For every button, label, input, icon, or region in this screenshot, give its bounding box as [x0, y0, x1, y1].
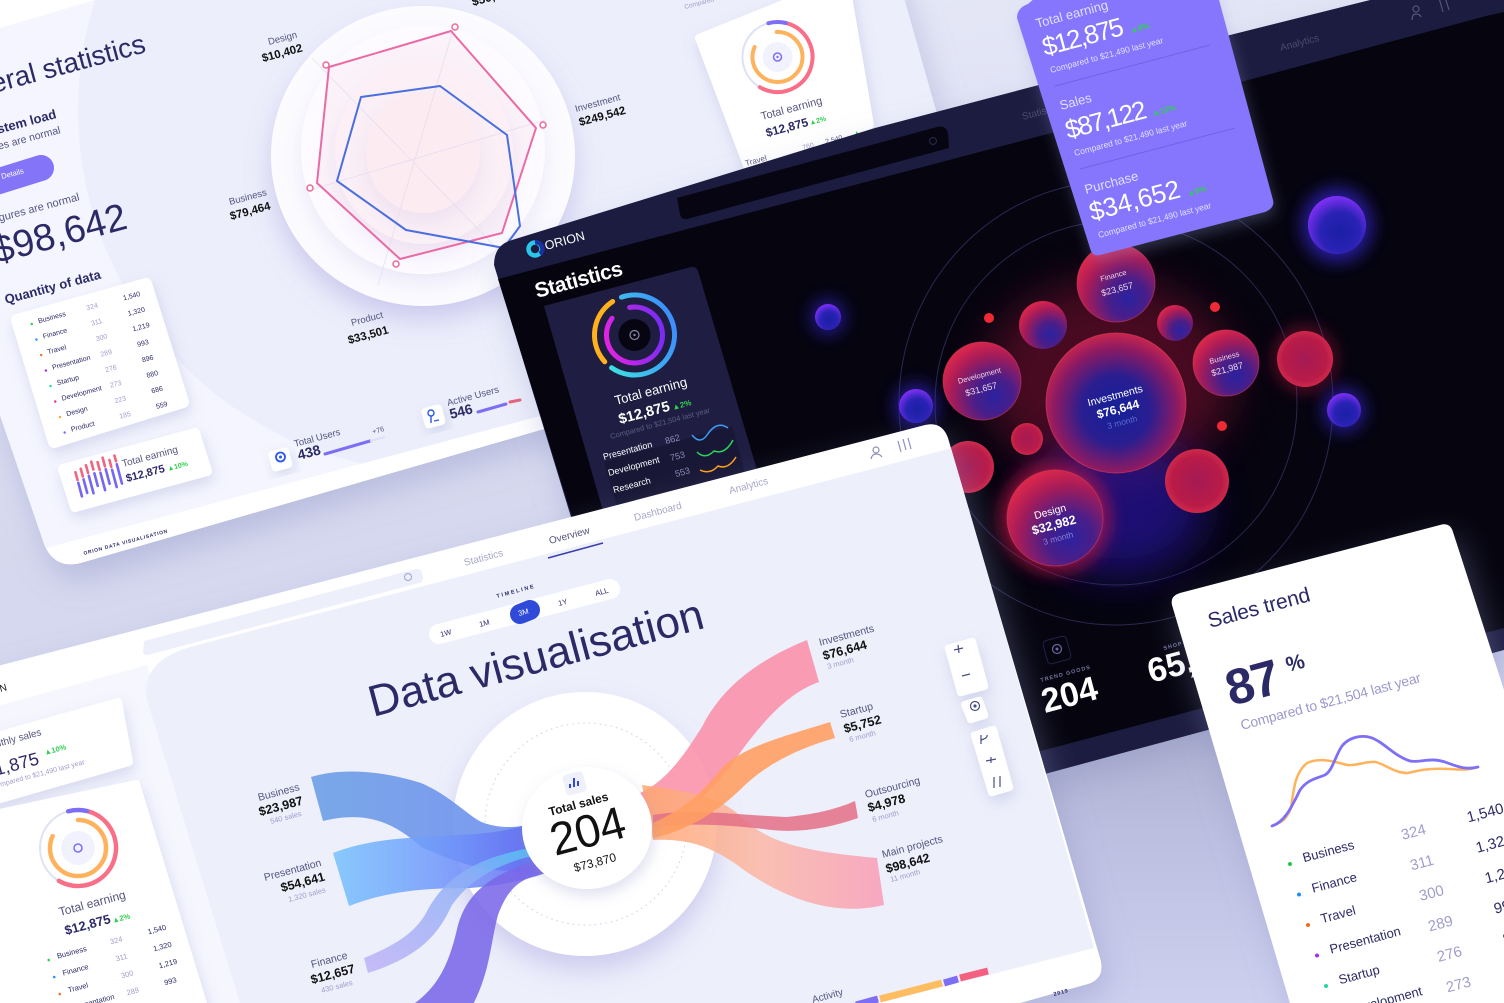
table card: quantity of data: Product — [70, 421, 96, 434]
card: left total earning: $12,875 — [63, 911, 112, 938]
card: left total earning: 1,219 — [158, 957, 178, 970]
card: left total earning: 993 — [163, 975, 178, 987]
radar labels — [228, 0, 627, 347]
text: system load — [0, 106, 62, 158]
center total sales: $73,870 — [572, 850, 618, 875]
sankey labels left: Finance — [310, 950, 349, 971]
sankey labels left — [257, 781, 356, 995]
card: top total earning: ▲ — [853, 129, 861, 138]
card: dark total earning: Development — [607, 454, 661, 478]
card: left total earning: Finance — [61, 962, 89, 978]
card: left total earning: Total earning — [57, 888, 127, 919]
card: sales trend: Presentation — [1328, 923, 1402, 957]
bubble: investments — [1046, 333, 1186, 473]
table card: quantity of data: Presentation — [52, 355, 91, 372]
card: total earning with bars: $12,875 — [125, 463, 166, 485]
timeline selector: 1W — [439, 627, 453, 639]
bubble: investments: Investments — [1086, 383, 1144, 409]
bubble: design: $32,982 — [1030, 513, 1078, 538]
bubble: business — [1193, 330, 1259, 396]
background shade lower right — [1030, 700, 1330, 1003]
card: purple metrics: ▲9% — [1186, 184, 1207, 198]
bubble: design: Design — [1033, 502, 1068, 522]
radar labels: Business — [228, 187, 268, 208]
card: dark total earning: 753 — [669, 449, 686, 463]
radar labels: $79,464 — [229, 200, 273, 223]
bubble: finance — [1077, 244, 1155, 322]
card: purple metrics: ▲8% — [1129, 21, 1150, 35]
stat: total users — [267, 426, 385, 472]
search field — [143, 569, 423, 655]
card: left total earning: 1,320 — [152, 940, 173, 953]
card: purple metrics: $34,652 — [1086, 174, 1183, 227]
sankey labels right: $98,642 — [884, 851, 931, 876]
card: top total earning: 760 — [802, 142, 815, 152]
card: left total earning: ▲2% — [111, 911, 131, 925]
card: dark total earning: Total earning — [613, 374, 689, 408]
stat: total users: Total Users — [293, 427, 342, 450]
bubble: design — [1007, 470, 1103, 566]
navigation tabs — [463, 476, 769, 569]
radar labels: Product — [350, 310, 385, 329]
card: left total earning: 300 — [120, 968, 134, 980]
card: sales trend: Business — [1301, 837, 1356, 865]
center total sales: 204 — [544, 796, 631, 866]
heading: quantity of data: Quantity of data — [3, 267, 103, 307]
sankey labels left: 1,320 sales — [287, 885, 327, 904]
sankey labels left: $12,657 — [309, 962, 356, 987]
bubble cluster — [815, 196, 1366, 513]
bubble: finance: $23,657 — [1100, 280, 1134, 298]
sankey labels right: 6 month — [848, 728, 877, 744]
table card: quantity of data: 686 — [151, 386, 164, 395]
table card: quantity of data: 300 — [95, 333, 108, 343]
card: dark total earning: Presentation — [602, 439, 653, 462]
card: total earning with bars — [63, 433, 207, 507]
button: details: Details — [0, 166, 25, 181]
logo: orion — [528, 229, 586, 256]
table card: quantity of data: 276 — [105, 364, 118, 374]
icon: dark user and sliders — [1412, 0, 1449, 20]
card: sales trend — [1172, 524, 1504, 1003]
card: sales trend: 276 — [1435, 943, 1464, 966]
card: purple metrics: Purchase — [1083, 168, 1140, 197]
card: left total earning: Business — [56, 944, 88, 961]
stat: active users — [420, 384, 520, 429]
table card: quantity of data: 896 — [141, 355, 154, 364]
card: dark total earning: $12,875 — [617, 399, 672, 428]
card: purple metrics — [1017, 0, 1273, 255]
table card: quantity of data: 273 — [109, 380, 122, 390]
card: top total earning: 2,540 — [825, 135, 844, 146]
panel: orion dark dashboard — [494, 0, 1504, 874]
card: sales trend: % — [1283, 650, 1308, 677]
bubble: development: Development — [957, 365, 1003, 386]
table card: quantity of data: 880 — [146, 370, 159, 380]
card: purple metrics: $12,875 — [1039, 11, 1127, 62]
icon: user — [871, 447, 882, 459]
bubble: development — [943, 342, 1021, 420]
bubble glow — [810, 187, 1373, 575]
stats: trend goods: TREND GOODS — [1040, 665, 1092, 684]
table card: quantity of data: 1,540 — [122, 291, 141, 302]
navigation tabs: Overview — [548, 525, 592, 547]
card: left total earning: 1,540 — [147, 923, 167, 936]
logo: orion: ORION — [543, 229, 586, 253]
radar labels: $33,501 — [347, 324, 391, 347]
sankey labels left: Presentation — [263, 857, 323, 884]
table card: quantity of data: 559 — [155, 401, 169, 411]
radar labels: $249,542 — [578, 105, 627, 129]
bubble: design: 3 month — [1042, 529, 1075, 547]
table card: quantity of data: 289 — [100, 349, 113, 359]
sankey labels right: Main projects — [881, 833, 944, 861]
card: left total earning — [0, 784, 205, 1003]
sankey labels right: 6 month — [871, 808, 900, 824]
panel: general statistics — [0, 0, 1020, 590]
table card: quantity of data: 1,219 — [132, 322, 151, 333]
card: purple metrics: ▲12% — [1151, 103, 1177, 118]
bubble: investments: 3 month — [1106, 413, 1139, 431]
card: purple metrics: Compared to $21,490 last year — [1049, 35, 1164, 75]
bubble: development: $31,657 — [964, 380, 998, 398]
card: purple metrics: $87,122 — [1062, 94, 1150, 145]
table card: quantity of data: 324 — [86, 302, 99, 312]
radar chart — [271, 6, 575, 306]
button: details — [0, 166, 41, 187]
table card: quantity of data: 1,320 — [127, 307, 146, 318]
card: purple metrics: Compared to $21,490 last year — [1097, 200, 1212, 240]
sankey labels right: Investments — [818, 623, 875, 649]
card: top total earning: Travel — [744, 154, 768, 168]
stats: trend goods: SHOP — [1163, 641, 1183, 652]
central disc — [453, 692, 717, 956]
bubble: finance: Finance — [1099, 268, 1127, 283]
dark header search field — [677, 127, 949, 219]
bubble: business: $21,987 — [1210, 360, 1244, 378]
center total sales: Total sales — [547, 789, 610, 819]
stats: trend goods — [1037, 635, 1199, 721]
card: sales trend: 324 — [1399, 821, 1428, 844]
table card: quantity of data: Finance — [42, 327, 68, 341]
card: sales trend: 300 — [1417, 882, 1446, 905]
table card: quantity of data: Business — [37, 311, 67, 325]
sankey labels right — [818, 623, 944, 884]
table card: quantity of data: Development — [61, 385, 103, 403]
footer: orion data visualisation: ORION DATA VISUALISATION — [83, 529, 169, 557]
timeline selector: TIMELINE — [496, 584, 536, 600]
sankey labels right: 11 month — [889, 867, 921, 884]
stat: active users: Active Users — [446, 384, 501, 409]
icon: sliders — [898, 438, 911, 452]
card: purple metrics: Sales — [1058, 90, 1094, 113]
card: sales trend: 311 — [1408, 852, 1436, 874]
timeline selector — [439, 584, 610, 639]
card: dark total earning: 862 — [664, 432, 681, 446]
card: monthly sales: ▲10% — [43, 742, 68, 757]
dark nav labels — [1021, 33, 1320, 123]
sankey labels right: 3 month — [826, 655, 855, 671]
stat: total users: +76 — [372, 426, 385, 436]
card: dark total earning: 553 — [674, 465, 691, 479]
bubble: business: Business — [1208, 349, 1240, 366]
navigation tabs: Dashboard — [633, 501, 683, 524]
card: left total earning: Travel — [67, 981, 89, 995]
card: top total earning: $12,875 — [764, 115, 810, 140]
card: dark total earning: Compared to $21,504 last year — [609, 405, 711, 441]
heading: statistics: Statistics — [532, 257, 625, 303]
navigation tabs: Statistics — [463, 548, 504, 569]
stat: active users: 546 — [448, 400, 475, 422]
timeline selector: 1Y — [557, 597, 568, 608]
card: total earning with bars: ▲10% — [167, 461, 189, 473]
sankey labels left: 540 sales — [269, 809, 303, 826]
activity bar — [811, 971, 988, 1003]
stats: trend goods: 204 — [1037, 669, 1102, 721]
card: sales trend: Travel — [1319, 902, 1357, 926]
sankey labels right: $4,978 — [866, 791, 907, 815]
card: dark total earning: Research — [612, 475, 652, 495]
table card: quantity of data — [17, 284, 183, 442]
table card: quantity of data: 993 — [137, 339, 150, 349]
card: sales trend: Sales trend — [1205, 583, 1313, 633]
card: left total earning: 324 — [109, 934, 123, 946]
table card: quantity of data: 185 — [119, 411, 132, 421]
card: top total earning: Total earning — [760, 95, 824, 123]
table card: quantity of data: 223 — [114, 395, 127, 405]
table card: quantity of data: Travel — [47, 344, 68, 356]
stats: trend goods: 65, — [1143, 642, 1199, 691]
bubble: investments: $76,644 — [1095, 397, 1141, 422]
year label: 2019 — [1053, 988, 1069, 998]
heading: data visualisation: Data visualisation — [363, 590, 709, 727]
card: sales trend: Finance — [1310, 869, 1358, 896]
icon: search — [930, 138, 936, 144]
panel: data visualisation — [0, 424, 1102, 1003]
sankey labels right: $5,752 — [842, 712, 883, 736]
stat: total users: 438 — [296, 441, 323, 463]
orbit rings — [899, 181, 1333, 625]
card: left total earning: 289 — [126, 985, 140, 997]
sankey labels left: 430 sales — [320, 978, 354, 995]
zoom controls — [945, 638, 1013, 796]
sankey labels right: Startup — [839, 701, 875, 721]
card: purple metrics: Compared to $21,490 last year — [1073, 118, 1188, 158]
sankey labels left: $54,641 — [279, 870, 326, 895]
center total sales — [522, 767, 652, 889]
sankey labels right: $76,644 — [821, 638, 868, 663]
card: sales trend: Compared to $21,504 last year — [1239, 669, 1423, 733]
sankey labels left: Business — [257, 781, 301, 804]
sankey labels right: Outsourcing — [864, 775, 922, 801]
card: total earning with bars: Total earning — [121, 444, 179, 470]
card: left total earning: 311 — [115, 952, 128, 963]
card: monthly sales — [0, 702, 129, 802]
timeline selector: 1M — [478, 618, 491, 629]
dark nav labels: Statistics — [1021, 102, 1062, 123]
table card: quantity of data: Startup — [56, 374, 80, 387]
card: sales trend: Startup — [1337, 962, 1381, 987]
card: sales trend: 87 — [1219, 649, 1286, 717]
timeline selector: ALL — [594, 586, 609, 598]
card: sales trend: 273 — [1444, 973, 1473, 996]
navigation tabs: Analytics — [728, 476, 769, 497]
dark nav labels: Analytics — [1279, 33, 1320, 54]
table card: quantity of data: 311 — [90, 318, 103, 328]
timeline selector: 3M — [517, 607, 530, 618]
radar labels: $10,402 — [261, 43, 304, 65]
card: top total earning — [684, 0, 870, 168]
card: sales trend: 289 — [1426, 912, 1455, 935]
card: top total earning: ▲2% — [809, 116, 828, 127]
sankey chart — [311, 640, 884, 1003]
radar labels: Investment — [574, 92, 622, 115]
card: dark total earning: ▲2% — [671, 398, 692, 412]
sankey labels left: $23,987 — [257, 794, 304, 819]
radar labels: Design — [267, 30, 298, 48]
card: dark total earning — [544, 267, 760, 525]
table card: quantity of data: Design — [66, 406, 89, 418]
control icons — [954, 645, 1000, 788]
